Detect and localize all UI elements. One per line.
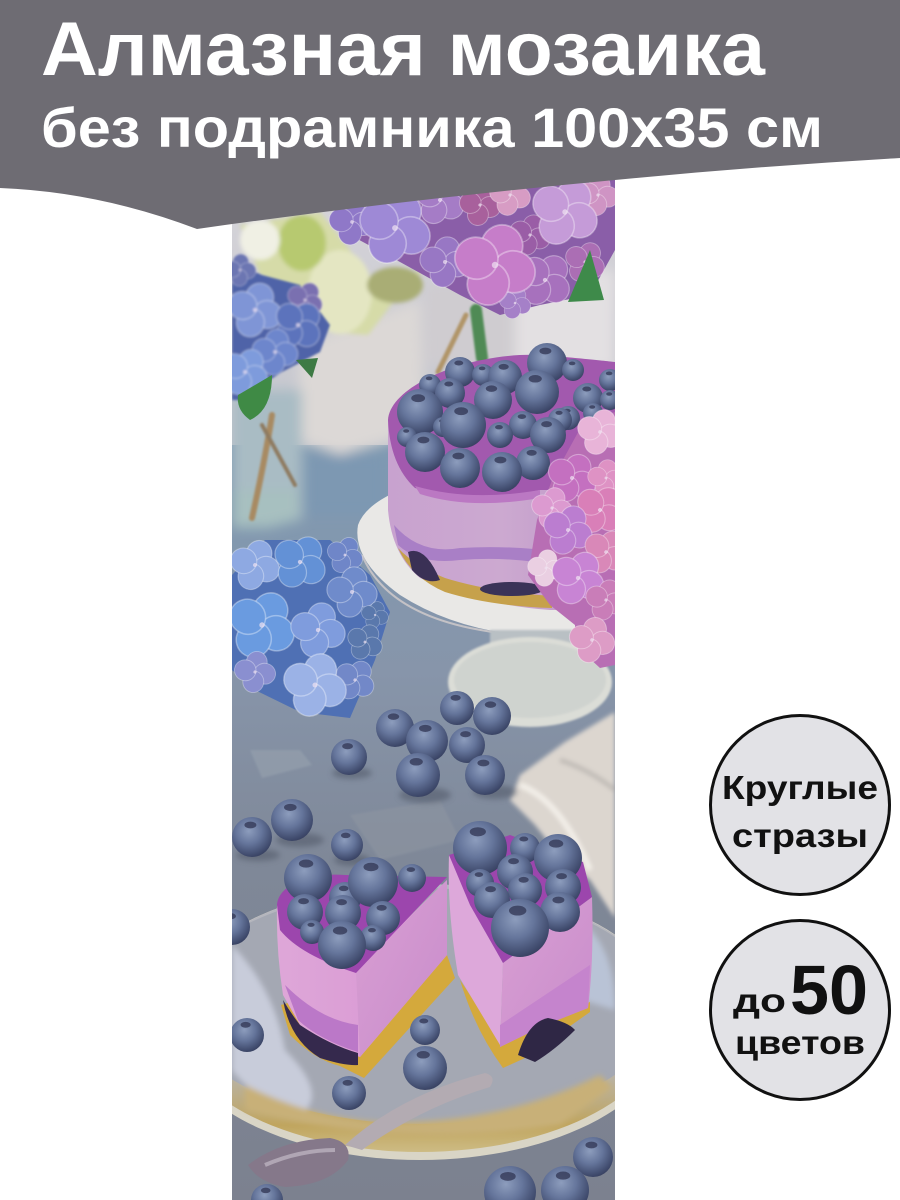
loose blueberries	[214, 691, 613, 1200]
flower: blue-purple hydrangea left	[232, 253, 332, 402]
cake plate	[357, 496, 575, 633]
flower: top purple-pink hydrangea	[328, 180, 615, 319]
badge: up to 50 colours: 50	[790, 951, 868, 1029]
leaf	[238, 375, 272, 420]
flower: blue hydrangea lower left	[232, 536, 390, 718]
badge: round rhinestones: стразы	[732, 817, 868, 854]
badge: up to 50 colours: цветов	[735, 1024, 865, 1061]
leaf small	[296, 358, 318, 378]
cake	[388, 355, 615, 610]
white linen cloth	[510, 712, 615, 918]
berries on slices	[284, 821, 582, 969]
cake pedestal	[448, 630, 612, 727]
left slice body	[277, 880, 447, 1057]
berry shadows	[236, 767, 517, 866]
badge: round rhinestones	[710, 716, 890, 894]
berry layer in cake base	[480, 582, 544, 596]
left slice crust	[281, 955, 455, 1078]
left slice band	[285, 985, 358, 1052]
right slice right face	[500, 897, 592, 1047]
berries on the cake	[397, 343, 621, 492]
right slice left face	[449, 855, 503, 1045]
table surface	[232, 445, 615, 1200]
left slice glaze	[277, 875, 447, 973]
silver spoon	[248, 1073, 493, 1187]
right slice crust	[460, 980, 590, 1068]
right slice band	[500, 965, 590, 1047]
upper background	[232, 210, 615, 445]
flower: pink hydrangea right	[528, 409, 615, 668]
badge: round rhinestones: Круглые	[722, 769, 878, 806]
left cheesecake slice	[277, 875, 455, 1078]
left slice right face	[356, 880, 447, 1057]
table scratches	[252, 750, 444, 858]
marble glaze	[232, 925, 615, 1135]
leaf right	[568, 250, 604, 302]
left slice berry base	[283, 1000, 358, 1065]
berry layer in cake	[408, 551, 440, 581]
blurred white cloth and vases	[232, 270, 615, 528]
cake glaze	[388, 355, 615, 497]
right slice glaze	[449, 835, 592, 963]
header banner	[0, 0, 900, 229]
right slice berry base	[518, 1018, 575, 1062]
vase stems	[252, 310, 482, 518]
photo: blueberry cheesecake with hydrangeas	[232, 180, 615, 1200]
right cheesecake slice	[449, 835, 592, 1068]
badge: up to 50 colours	[710, 920, 890, 1100]
serving plate	[232, 884, 615, 1160]
title: Алмазная мозаика	[41, 7, 766, 92]
cake side	[388, 422, 556, 610]
badge: up to 50 colours: до	[733, 982, 786, 1019]
flower: white-green hydrangea	[240, 212, 425, 335]
subtitle: без подрамника 100х35 см	[41, 96, 823, 159]
cake purple layer	[394, 525, 532, 562]
cake crust	[398, 548, 552, 608]
